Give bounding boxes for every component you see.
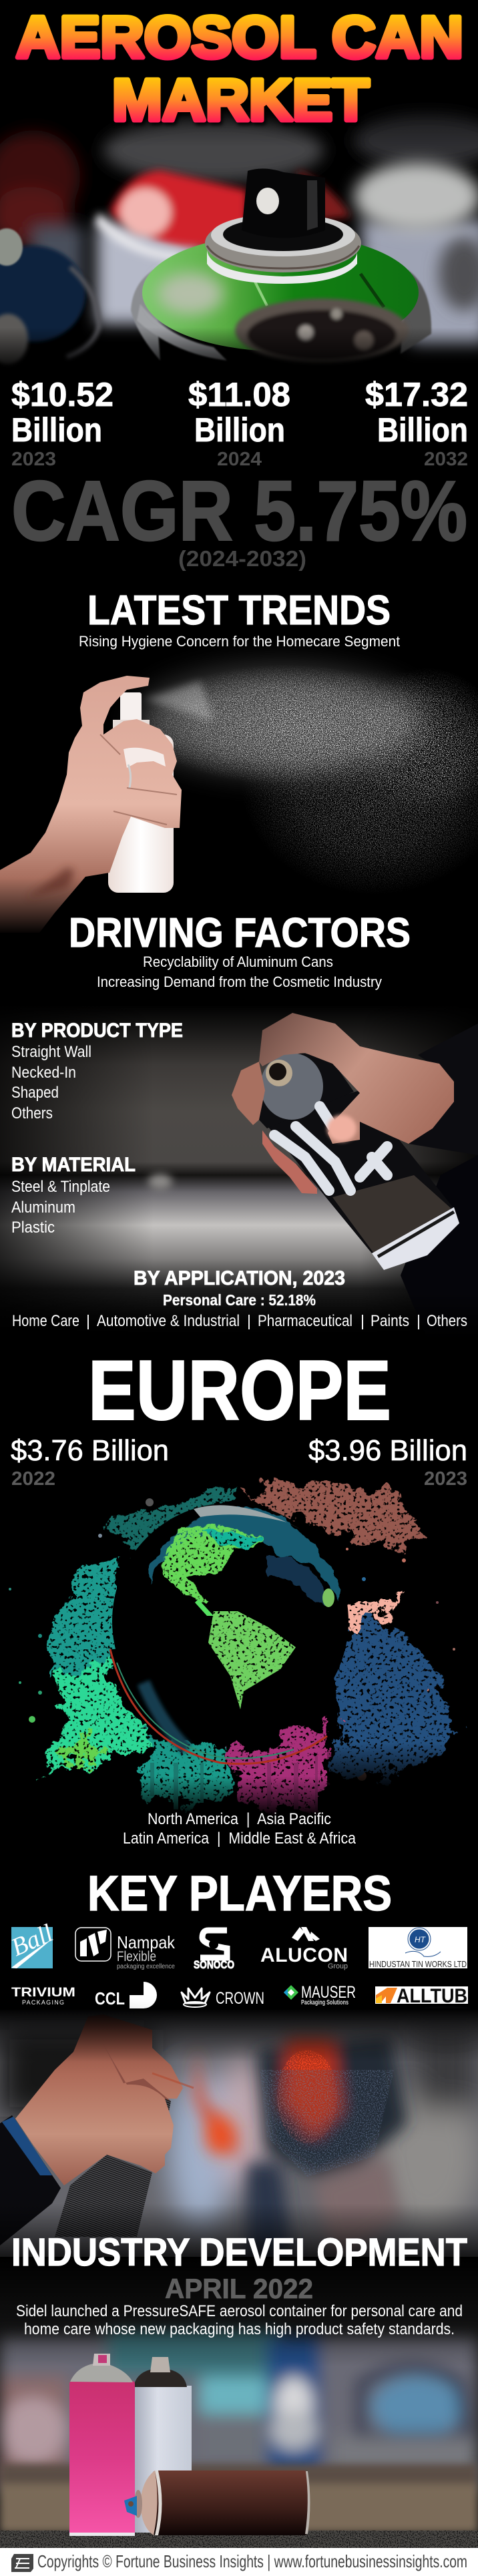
sleeve	[409, 1024, 478, 1155]
date: APRIL 2022	[165, 2273, 313, 2304]
panel: by material: Aluminum	[11, 1199, 75, 1217]
title: AEROSOL CAN	[16, 4, 463, 70]
title	[16, 4, 463, 133]
hand	[0, 676, 182, 933]
panel: by application: Others	[427, 1312, 467, 1330]
photo: hand holding graffiti spray can	[0, 1005, 478, 1339]
stat: 2024 market value: Billion	[194, 411, 285, 449]
stat: 2023 market value	[11, 376, 113, 470]
panel: by material	[11, 1154, 136, 1237]
panel: by application: Pharmaceutical	[258, 1312, 352, 1330]
stat: 2032 market value: 2032	[424, 449, 468, 470]
stat: 2023 market value: 2023	[11, 449, 56, 470]
regions list	[123, 1810, 356, 1848]
heading: europe: EUROPE	[88, 1343, 391, 1438]
panel: by material: Plastic	[11, 1219, 55, 1237]
logo: Alucon: Group	[328, 1962, 348, 1970]
graffiti marks	[274, 1106, 387, 1191]
panel: by product type: Necked-In	[11, 1064, 76, 1082]
stat: europe 2022: $3.76 Billion	[11, 1434, 169, 1467]
panel: by product type: Straight Wall	[11, 1043, 91, 1061]
title: MARKET	[112, 67, 369, 133]
blurred background cans	[0, 114, 478, 287]
mist	[137, 664, 478, 895]
bottle	[108, 692, 174, 893]
latest trends text: Rising Hygiene Concern for the Homecare Segment	[79, 633, 400, 650]
stat: europe 2023: $3.96 Billion	[308, 1434, 467, 1467]
stat: 2032 market value	[365, 376, 468, 470]
logo: Trivium: PACKAGING	[22, 1999, 64, 2006]
regions list: North America | Asia Pacific	[148, 1810, 331, 1828]
panel: by application: |	[247, 1312, 251, 1329]
red spray texture	[260, 2050, 394, 2177]
logo: Nampak Flexible: Nampak	[117, 1932, 176, 1952]
icon: Fortune Business Insights logo	[11, 2554, 33, 2572]
blurred white can bodies	[97, 220, 478, 347]
logo: Hindustan Tin Works: HT	[415, 1935, 427, 1944]
black nozzle	[242, 168, 325, 238]
logo: Hindustan Tin Works	[369, 1927, 467, 1969]
development description	[16, 2302, 463, 2338]
stat: europe 2022: 2022	[11, 1468, 55, 1490]
panel: by product type: Others	[11, 1104, 53, 1122]
blurred red can	[95, 170, 350, 262]
nozzle tip	[256, 188, 279, 214]
CAGR period: (2024-2032)	[178, 546, 306, 571]
hand	[15, 2014, 183, 2185]
panel: by application: |	[86, 1312, 90, 1329]
logo: Mauser: Packaging Solutions	[301, 1999, 348, 2006]
logo: Alltub: ALLTUB	[397, 1985, 467, 2007]
logo: Sonoco: SONOCO	[194, 1958, 234, 1971]
stat: 2024 market value: 2024	[217, 449, 262, 470]
logo: Sonoco	[194, 1930, 234, 1971]
panel: by application: |	[417, 1312, 421, 1329]
navy can left	[0, 228, 99, 365]
photo: spray cans hero	[0, 60, 478, 374]
green can	[131, 168, 431, 361]
photo: spray cans on ground	[0, 2257, 478, 2548]
blurred grey can right	[354, 162, 478, 310]
stat: 2032 market value: $17.32	[365, 376, 468, 413]
regions list: Latin America | Middle East & Africa	[123, 1830, 356, 1848]
logo: Trivium: TRIVIUM	[11, 1986, 75, 2000]
panel: by application: BY APPLICATION, 2023	[134, 1267, 345, 1289]
asphalt	[0, 2531, 478, 2548]
panel: by application	[12, 1267, 467, 1330]
panel: by material: Steel & Tinplate	[11, 1178, 110, 1196]
pink can	[69, 2354, 135, 2536]
orbit lines	[110, 1649, 327, 1764]
panel: by application: Personal Care : 52.18%	[163, 1291, 316, 1309]
stat: europe 2022	[11, 1434, 169, 1490]
panel: by application: Automotive & Industrial	[97, 1312, 240, 1330]
panel: by application: Paints	[371, 1312, 409, 1330]
globe sphere	[112, 1503, 348, 1739]
logo: CCL	[95, 1982, 157, 2009]
logo: Crown: CROWN	[216, 1989, 264, 2008]
panel: by product type	[11, 1020, 183, 1122]
logo: Nampak Flexible: packaging excellence	[117, 1963, 175, 1970]
heading: driving factors: DRIVING FACTORS	[69, 910, 411, 956]
can	[259, 1052, 459, 1270]
logo: Ball: Ball	[7, 1919, 57, 1962]
north america	[162, 1524, 262, 1602]
stat: europe 2023	[308, 1434, 467, 1490]
ring	[128, 765, 131, 788]
stat: europe 2023: 2023	[424, 1468, 467, 1490]
driving factors list: Increasing Demand from the Cosmetic Industry	[97, 974, 382, 990]
footer	[0, 2548, 478, 2576]
logo: Alucon	[260, 1927, 348, 1970]
driving factors list	[97, 953, 382, 990]
paint splashes	[40, 1482, 461, 1809]
sleeve	[0, 2115, 61, 2245]
heading: key players: KEY PLAYERS	[87, 1866, 392, 1921]
stat: 2024 market value: $11.08	[188, 376, 290, 413]
stat: 2023 market value: Billion	[11, 411, 102, 449]
metal ring	[205, 214, 361, 272]
stat: 2024 market value	[188, 376, 290, 470]
africa fragment	[322, 1588, 334, 1607]
blurred metal lid foreground	[235, 298, 409, 363]
logo: Alucon: ALUCON	[260, 1944, 348, 1966]
stat: 2032 market value: Billion	[377, 411, 468, 449]
panel: by product type: Shaped	[11, 1084, 59, 1102]
illustration: paint splash globe	[9, 1482, 478, 1816]
heading: latest trends: LATEST TRENDS	[87, 588, 391, 634]
south america	[208, 1611, 296, 1709]
bottle between fingers	[124, 748, 166, 768]
logo: Mauser: MAUSER	[301, 1983, 356, 2002]
logo: Crown	[182, 1988, 264, 2008]
paint specks	[9, 1498, 455, 1781]
illustration: hand spraying bottle with mist	[0, 664, 478, 933]
photo: hand spraying on graffiti wall	[0, 2008, 478, 2324]
driving factors list: Recyclability of Aluminum Cans	[143, 953, 333, 970]
drips	[150, 1756, 318, 1809]
logo: Nampak Flexible: Flexible	[117, 1949, 156, 1964]
panel: by material: BY MATERIAL	[11, 1154, 136, 1176]
logo: CCL: CCL	[95, 1988, 125, 2008]
panel: by application: |	[361, 1312, 365, 1329]
white shoulder	[207, 250, 357, 284]
stat: 2023 market value: $10.52	[11, 376, 113, 413]
logo: Nampak Flexible	[75, 1928, 176, 1970]
spray can	[55, 2079, 171, 2237]
white can	[134, 2357, 192, 2533]
panel: by application: Home Care	[12, 1312, 79, 1330]
hand	[232, 1013, 454, 1194]
logo: Trivium	[11, 1986, 75, 2006]
brown can lying down	[124, 2471, 310, 2535]
panel: by product type: BY PRODUCT TYPE	[11, 1020, 183, 1042]
logo: Mauser	[284, 1983, 356, 2006]
